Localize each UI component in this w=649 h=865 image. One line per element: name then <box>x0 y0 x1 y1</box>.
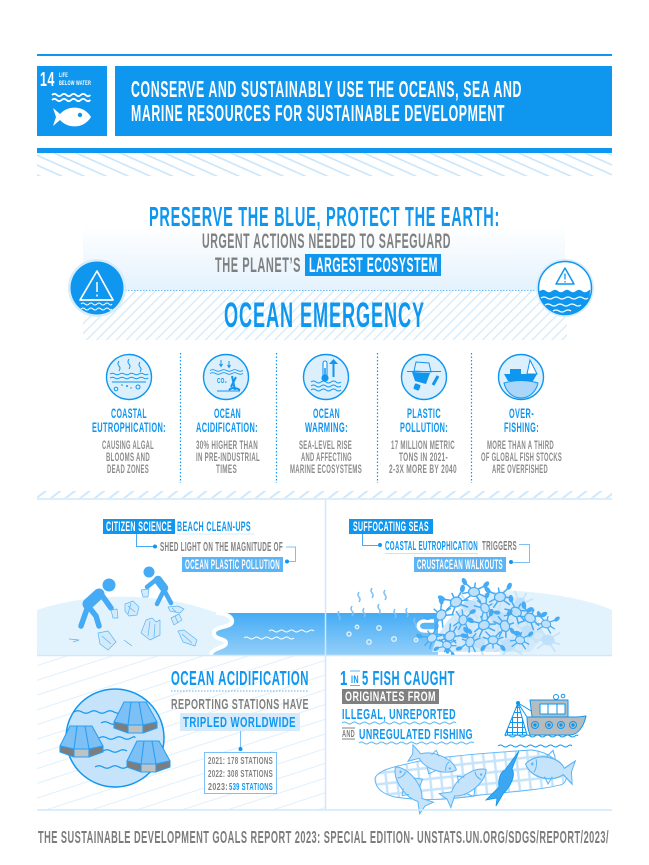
threat: plastic pollution: PLASTIC <box>407 405 441 421</box>
SDG 14 badge: BELOW WATER <box>59 80 91 87</box>
threat: ocean acidification: TIMES <box>216 464 237 476</box>
threat: ocean warming <box>290 354 362 476</box>
station counts: 2021: 178 STATIONS <box>208 755 273 767</box>
icon: floating plastic <box>402 354 446 400</box>
panel: suffocating seas <box>326 500 612 660</box>
person 2 <box>144 566 171 604</box>
callout text <box>349 518 530 572</box>
threat: coastal eutrophication <box>92 354 166 476</box>
heading: 5 FISH CAUGHT <box>362 667 455 690</box>
fishing net with fish <box>375 742 577 816</box>
threat: ocean warming: SEA-LEVEL RISE <box>299 440 352 452</box>
callout text: COASTAL EUTROPHICATION <box>385 538 478 553</box>
heading: IN <box>351 674 359 686</box>
subheading <box>202 230 451 277</box>
threat: ocean warming: OCEAN <box>313 405 340 421</box>
station counts <box>204 752 276 794</box>
panel frame lines <box>37 499 612 810</box>
callout text: SUFFOCATING SEAS <box>353 518 429 534</box>
icon: CO2 and coral: CO₂ <box>217 378 227 385</box>
highlight: TRIPLED WORLDWIDE <box>183 715 296 731</box>
illegal fishing text: AND <box>342 729 355 740</box>
threat: overfishing: FISHING: <box>504 419 539 435</box>
threat: ocean acidification <box>196 354 260 476</box>
callout text: CITIZEN SCIENCE <box>106 518 172 534</box>
panel: ocean acidification <box>37 656 325 810</box>
ocean emergency title: OCEAN EMERGENCY <box>224 296 425 335</box>
highlight <box>180 713 300 731</box>
heading panel: ocean emergency <box>68 201 594 340</box>
fishing boat <box>498 694 586 747</box>
threat: coastal eutrophication: EUTROPHICATION: <box>92 419 166 435</box>
threat: overfishing: MORE THAN A THIRD <box>487 440 554 452</box>
heading: OCEAN ACIDIFICATION <box>171 667 309 690</box>
icon: algal bloom <box>106 354 152 400</box>
threat: plastic pollution: POLLUTION: <box>400 419 448 435</box>
crustacean pile <box>414 577 561 660</box>
threat: overfishing <box>481 354 562 476</box>
callout text: OCEAN PLASTIC POLLUTION <box>185 557 280 572</box>
heading: 1 <box>340 667 348 690</box>
threat: ocean acidification: ACIDIFICATION: <box>196 419 258 435</box>
icon: thermometer and rising arrow <box>304 354 348 400</box>
icon: warning over water <box>68 259 126 317</box>
illegal fishing text: ILLEGAL, UNREPORTED <box>342 707 456 723</box>
subheading: LARGEST ECOSYSTEM <box>309 254 438 277</box>
grey label: ORIGINATES FROM <box>345 688 436 704</box>
panel: beach clean-ups <box>37 500 325 656</box>
icon: warning above waves <box>536 259 594 317</box>
threat: ocean acidification: OCEAN <box>214 405 241 421</box>
illegal fishing text: UNREGULATED FISHING <box>359 727 473 743</box>
threat: plastic pollution <box>389 354 457 476</box>
title banner <box>115 66 612 136</box>
threat: plastic pollution: 2-3X MORE BY 2040 <box>389 464 457 476</box>
threat: overfishing: OF GLOBAL FISH STOCKS <box>481 452 562 464</box>
heading <box>340 667 455 690</box>
threat: coastal eutrophication: CAUSING ALGAL <box>102 440 154 452</box>
threat: plastic pollution: TONS IN 2021- <box>399 452 448 464</box>
station counts: 539 STATIONS <box>229 781 273 793</box>
header band <box>37 54 612 176</box>
callout text: CRUSTACEAN WALKOUTS <box>417 557 503 572</box>
panel: illegal fishing <box>326 656 612 816</box>
threat: ocean warming: WARMING: <box>305 419 348 435</box>
callout text <box>103 518 296 572</box>
threat: overfishing: ARE OVERFISHED <box>492 464 548 476</box>
subheading: THE PLANET’S <box>215 254 301 277</box>
threat: ocean acidification: 30% HIGHER THAN <box>196 440 258 452</box>
threat: ocean warming: MARINE ECOSYSTEMS <box>290 464 362 476</box>
station counts: 2023: <box>208 781 228 793</box>
SDG 14 badge <box>37 66 107 136</box>
beach and water <box>326 590 612 655</box>
illegal fishing text <box>342 707 474 744</box>
threat: coastal eutrophication: COASTAL <box>111 405 147 421</box>
icon: boat and net <box>498 354 544 400</box>
plastic litter <box>69 589 197 650</box>
callout text: SHED LIGHT ON THE MAGNITUDE OF <box>160 539 283 554</box>
threat: ocean acidification: IN PRE-INDUSTRIAL <box>196 452 260 464</box>
grey label <box>342 688 439 704</box>
panel: five threats <box>92 353 562 483</box>
SDG 14 badge: 14 <box>40 69 55 91</box>
threat: coastal eutrophication: BLOOMS AND <box>106 452 150 464</box>
beach and water scene <box>37 597 325 655</box>
callout text: TRIGGERS <box>482 538 517 553</box>
algae bubbles <box>338 588 418 644</box>
threat: coastal eutrophication: DEAD ZONES <box>107 464 149 476</box>
monitoring buoys illustration <box>60 689 170 787</box>
threat: overfishing: OVER- <box>509 405 534 421</box>
threat: plastic pollution: 17 MILLION METRIC <box>391 440 455 452</box>
person 1 <box>81 578 116 626</box>
threat: ocean warming: AND AFFECTING <box>301 452 352 464</box>
SDG 14 badge: LIFE <box>59 72 68 79</box>
reporting text: REPORTING STATIONS HAVE <box>171 697 309 713</box>
callout text: BEACH CLEAN-UPS <box>177 518 251 534</box>
station counts: 2022: 308 STATIONS <box>208 768 273 780</box>
